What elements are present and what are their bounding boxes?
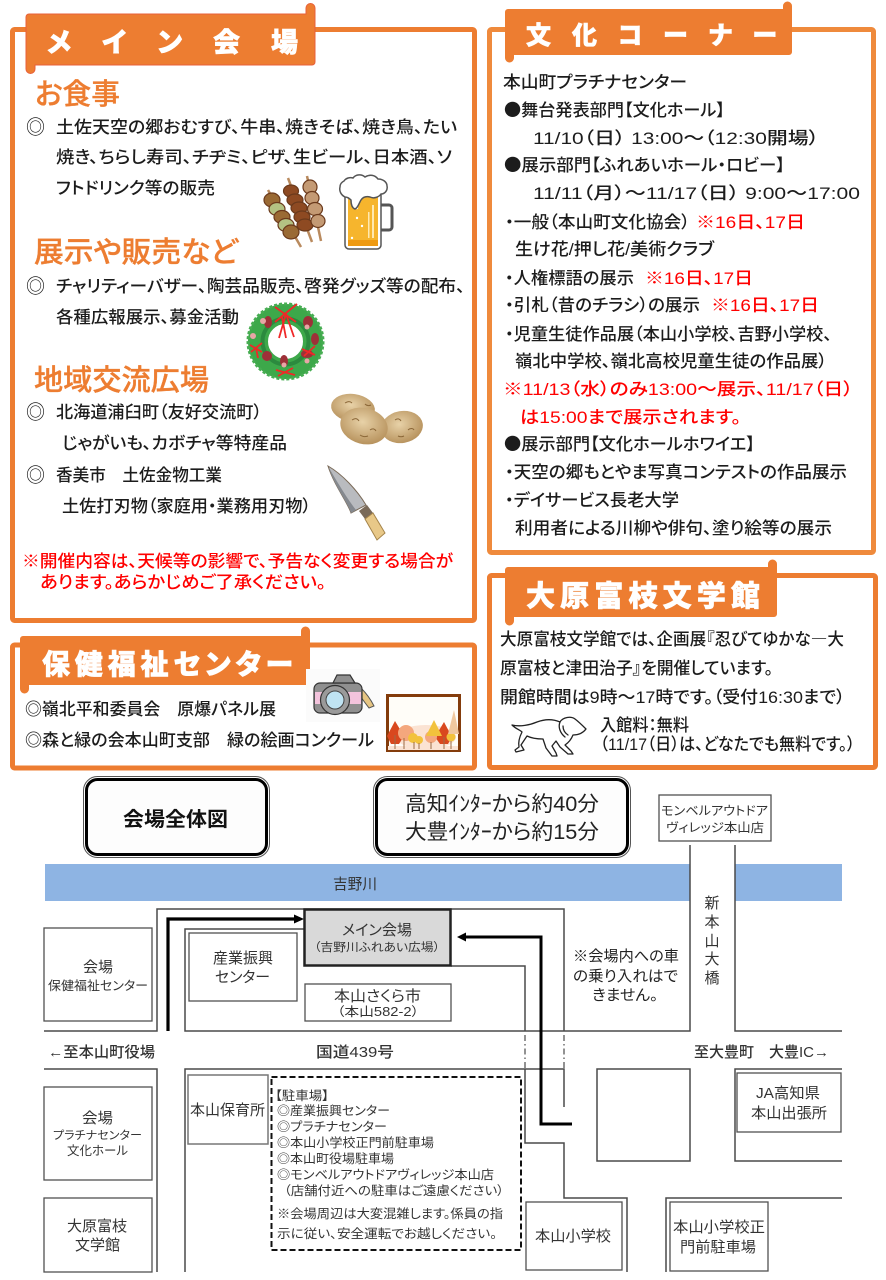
venue: main venue — [304, 910, 450, 966]
text block: culture schedule: ・デイサービス長老大学 — [505, 490, 679, 510]
text block: community list: 香美市 土佐金物工業 — [56, 466, 222, 485]
arrow: route from east — [457, 932, 572, 1124]
text block: culture schedule: 嶺北中学校、嶺北高校児童生徒の作品展） — [515, 352, 827, 371]
bridge label: 新 — [704, 895, 720, 912]
text block: exhibits list: チャリティーバザー、陶芸品販売、啓発グッズ等の配布、 — [56, 276, 465, 296]
building: nursery: 本山保育所 — [190, 1102, 265, 1119]
venue: health center — [44, 928, 152, 1021]
banner: health center title — [20, 626, 310, 694]
box: mont-bell store: モンベルアウトドア — [661, 804, 768, 818]
text block: museum details: 原富枝と津田治子』を開催しています。 — [500, 659, 773, 678]
building: school parking: 本山小学校正 — [673, 1219, 765, 1236]
venue: health center: 会場 — [83, 959, 113, 976]
building: industry center: 産業振興 — [213, 950, 273, 967]
text block: culture schedule: ●展示部門【ふれあいホール・ロビー】 — [504, 151, 785, 176]
text block: exhibits list — [26, 270, 465, 327]
text block: culture schedule: ※16日、17日 — [711, 296, 819, 315]
text block: museum details — [500, 625, 845, 707]
road labels: 至大豊町 大豊IC→ — [694, 1044, 829, 1061]
panel: health and welfare center — [12, 626, 474, 768]
text block: culture schedule — [503, 73, 860, 538]
arrow: route from west — [168, 914, 304, 1031]
icon: kitchen knife — [328, 466, 385, 540]
heading: community exchange: 地域交流広場 — [34, 364, 209, 397]
text block: health center items: ◎森と緑の会本山町支部 緑の絵画コンクール — [25, 731, 374, 750]
building: sakura market: （本山582-2） — [337, 1005, 419, 1019]
building: school parking — [670, 1202, 768, 1271]
text block: admission fee: 入館料：無料 — [600, 716, 689, 735]
bridge label: 橋 — [704, 970, 720, 987]
box: mont-bell store: ヴィレッジ本山店 — [666, 820, 764, 835]
text block: museum details: 大原富枝文学館では、企画展『忍びてゆかな―大 — [500, 625, 844, 650]
text block: culture schedule: ※16日、17日 — [645, 269, 753, 288]
bridge label: 本 — [704, 914, 720, 931]
text block: community list: 土佐打刃物（家庭用・業務用刃物） — [62, 497, 311, 516]
box: venue overview title — [84, 776, 270, 858]
banner: culture corner title: 文 化 コ ー ナ ー — [526, 22, 777, 50]
note: no cars: の乗り入れはで — [573, 968, 678, 985]
text block: community list — [26, 396, 311, 516]
building: JA office: 本山出張所 — [751, 1105, 827, 1122]
callout: parking info: ◎本山小学校正門前駐車場 — [277, 1135, 434, 1150]
banner: literature museum title — [505, 560, 777, 626]
text block: admission fee — [600, 716, 855, 754]
building: literature museum: 文学館 — [75, 1237, 120, 1254]
road labels: 国道439号 — [316, 1044, 394, 1061]
icon: framed autumn painting — [387, 696, 460, 750]
text block: culture schedule: 利用者による川柳や俳句、塗り絵等の展示 — [515, 519, 832, 538]
text block: culture schedule: ・一般（本山町文化協会） — [505, 213, 690, 232]
road labels — [48, 1044, 829, 1061]
venue: main venue: メイン会場 — [342, 922, 412, 939]
road labels: ←至本山町役場 — [48, 1044, 155, 1061]
text block: health center items: ◎嶺北平和委員会 原爆パネル展 — [25, 700, 276, 719]
building: literature museum — [44, 1198, 152, 1272]
river — [45, 864, 842, 901]
building: JA office — [737, 1073, 841, 1132]
callout: parking info: ◎本山町役場駐車場 — [277, 1151, 394, 1166]
bridge label: 大 — [704, 951, 720, 968]
text block: culture schedule: ・人権標語の展示 — [505, 269, 634, 288]
venue: platinum center: 会場 — [82, 1110, 113, 1127]
venue: main venue: （吉野川ふれあい広場） — [314, 941, 440, 954]
banner: culture corner title — [505, 2, 792, 63]
building: industry center: センター — [215, 969, 270, 986]
text block: admission fee: （11/17（日）は、どなたでも無料です。） — [600, 735, 855, 754]
callout: parking info: 示に従い、安全運転でお越しください。 — [277, 1227, 497, 1241]
river: 吉野川 — [333, 876, 377, 893]
panel: culture corner — [490, 2, 874, 553]
bridge label: 山 — [704, 933, 720, 950]
callout: parking info: ◎モンベルアウトドアヴィレッジ本山店 — [277, 1167, 494, 1182]
roads — [44, 845, 842, 1272]
text block: food list: 焼き、ちらし寿司、チヂミ、ピザ、生ビール、日本酒、ソ — [56, 148, 452, 167]
icon: potatoes — [329, 391, 425, 449]
banner: main venue title: メ イ ン 会 場 — [47, 28, 298, 58]
text block: culture schedule: ・児童生徒作品展（本山小学校、吉野小学校、 — [505, 325, 832, 344]
panel: literature museum — [490, 560, 876, 768]
building: industry center — [189, 933, 297, 1001]
text block: exhibits list: 各種広報展示、募金活動 — [56, 308, 239, 327]
text block: culture schedule: は15:00まで展示されます。 — [520, 408, 741, 427]
text block: community list: ◎ — [26, 396, 45, 425]
text block: culture schedule: 11/10（日） 13:00～（12:30開場） — [533, 129, 819, 148]
callout: parking info: 【駐車場】 — [275, 1088, 329, 1103]
box: travel time: 大豊ｲﾝﾀｰから約15分 — [405, 821, 599, 844]
banner: main venue title — [26, 4, 315, 73]
callout: parking info: ◎プラチナセンター — [277, 1120, 387, 1134]
text block: culture schedule: 本山町プラチナセンター — [503, 73, 687, 92]
building: sakura market — [305, 984, 451, 1021]
icon: wreath — [248, 304, 323, 379]
bridge label — [704, 895, 720, 987]
text block: food list: 土佐天空の郷おむすび、牛串、焼きそば、焼き鳥、たい — [56, 118, 457, 137]
text block: food list: フトドリンク等の販売 — [56, 179, 215, 198]
text block: health center items — [25, 700, 374, 750]
building: nursery — [188, 1075, 268, 1144]
building: sakura market: 本山さくら市 — [334, 988, 421, 1005]
text block: red notice — [22, 551, 453, 592]
note: no cars: きません。 — [592, 987, 658, 1004]
heading: food: お食事 — [35, 78, 120, 111]
venue: health center: 保健福祉センター — [48, 978, 148, 993]
text block: culture schedule: ●舞台発表部門【文化ホール】 — [504, 96, 725, 121]
box: travel time — [374, 776, 630, 858]
text block: museum details: 開館時間は9時～17時です。（受付16:30まで） — [500, 688, 845, 707]
text block: culture schedule: ※11/13（水）のみ13:00～展示、11/17（日） — [503, 380, 853, 399]
text block: red notice: あります。あらかじめご了承ください。 — [40, 573, 326, 592]
banner: literature museum title: 大原富枝文学館 — [526, 580, 760, 613]
building: literature museum: 大原富枝 — [67, 1218, 127, 1235]
text block: culture schedule: 11/11（月）～11/17（日） 9:00～17:00 — [533, 184, 860, 203]
icon: dog — [512, 717, 586, 756]
text block: community list: じゃがいも、カボチャ等特産品 — [62, 433, 287, 453]
text block: food list: ◎ — [26, 111, 45, 140]
venue: platinum center — [44, 1087, 152, 1180]
text block: food list — [26, 111, 457, 198]
callout: parking info: （店舗付近への駐車はご遠慮ください） — [284, 1183, 504, 1198]
callout: parking info — [272, 1077, 521, 1250]
icon: beer mug — [340, 175, 392, 249]
heading: exhibits and sales: 展示や販売など — [34, 236, 240, 269]
text block: community list: 北海道浦臼町（友好交流町） — [56, 403, 262, 422]
text block: culture schedule: ・天空の郷もとやま写真コンテストの作品展示 — [505, 463, 847, 482]
text block: culture schedule: ●展示部門【文化ホールホワイエ】 — [504, 430, 755, 455]
text block: red notice: ※開催内容は、天候等の影響で、予告なく変更する場合が — [22, 551, 453, 571]
callout: parking info: ※会場周辺は大変混雑します。係員の指 — [277, 1206, 503, 1221]
banner: health center title: 保健福祉センター — [42, 649, 293, 680]
text block: culture schedule: ・引札（昔のチラシ）の展示 — [505, 296, 700, 315]
box: mont-bell store — [659, 795, 771, 841]
callout: parking info: ◎産業振興センター — [277, 1103, 390, 1118]
note: no cars: ※会場内への車 — [573, 948, 679, 965]
text block: culture schedule: ※16日、17日 — [696, 213, 805, 232]
icon: camera — [306, 669, 380, 722]
building: elementary school — [526, 1202, 622, 1270]
text block: community list: ◎ — [26, 459, 45, 488]
text block: culture schedule: 生け花/押し花/美術クラブ — [515, 239, 715, 259]
venue: platinum center: プラチナセンター — [53, 1129, 142, 1142]
building: JA office: JA高知県 — [756, 1085, 820, 1102]
text block: exhibits list: ◎ — [26, 270, 45, 299]
note: no cars — [573, 948, 679, 1004]
building: school parking: 門前駐車場 — [680, 1239, 756, 1256]
venue: platinum center: 文化ホール — [67, 1144, 128, 1158]
panel: main venue — [12, 4, 474, 620]
box: travel time: 高知ｲﾝﾀｰから約40分 — [405, 793, 599, 816]
map: venue map — [44, 845, 842, 1272]
icon: grilled skewers — [264, 176, 325, 247]
building: elementary school: 本山小学校 — [535, 1228, 611, 1245]
box: venue overview title: 会場全体図 — [123, 808, 228, 831]
